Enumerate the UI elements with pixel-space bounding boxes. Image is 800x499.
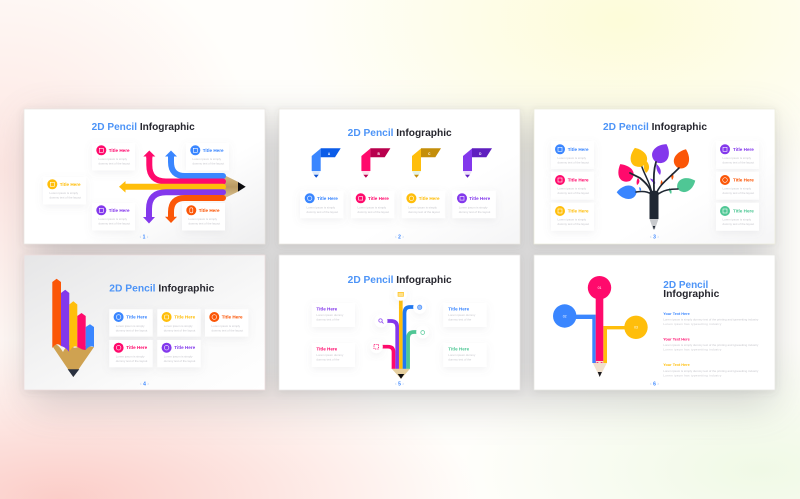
- card: pink: [312, 343, 355, 367]
- text block 1: Lorem ipsum is simply dummy text of the printing and typesetting industry: [663, 318, 759, 322]
- card: pink: [109, 340, 153, 367]
- text block 3: Lorem ipsum is simply dummy text of the printing and typesetting industry: [663, 369, 759, 373]
- text block 3: [663, 363, 759, 377]
- card: yellow: Title Here: [568, 209, 589, 214]
- card: blue: Lorem ipsum is simply: [116, 324, 145, 328]
- page number: ‹ 3 ›: [650, 234, 659, 240]
- card: green: dummy text of the layout: [722, 222, 754, 226]
- card: purple: [452, 191, 496, 218]
- card: yellow: dummy text of the layout: [50, 196, 81, 200]
- title: 2D Pencil Infographic: [603, 122, 707, 133]
- arrow: orange: [165, 198, 223, 223]
- card: pink: dummy text of the layout: [98, 162, 130, 166]
- text block 3: Lorem ipsum has typesetting industry: [663, 373, 722, 377]
- card: blue: [443, 303, 487, 327]
- card: purple: Lorem ipsum is simply: [98, 217, 128, 221]
- card: purple: Title Here: [174, 345, 196, 350]
- card: pink: [351, 191, 394, 218]
- text block 2: Lorem ipsum is simply dummy text of the printing and typesetting industry: [663, 343, 759, 347]
- card: purple: dummy text of the layout: [722, 160, 754, 164]
- arrow: yellow: [119, 181, 223, 193]
- card: orange: Lorem ipsum is simply: [722, 187, 752, 191]
- card: orange: Lorem ipsum is simply: [188, 217, 218, 221]
- card: orange: Title Here: [733, 178, 754, 183]
- card: pink: Lorem ipsum is simply: [558, 187, 587, 191]
- card: orange: Title Here: [222, 314, 243, 319]
- card: blue: dummy text of the layout: [192, 162, 224, 166]
- page number: ‹ 2 ›: [395, 234, 404, 240]
- card: green: Lorem ipsum is simply: [722, 218, 752, 222]
- page number: ‹ 6 ›: [650, 382, 659, 388]
- pencil A: A: [328, 152, 331, 156]
- card: pink: Title Here: [568, 178, 589, 183]
- panel shadow haze: [30, 120, 775, 405]
- pencil trunk: [650, 190, 658, 219]
- page number: ‹ 4 ›: [140, 382, 149, 388]
- card: purple: dummy text of the layout: [459, 210, 490, 214]
- card: pink: dummy text of the layout: [558, 191, 589, 195]
- text block 1: Lorem ipsum has typesetting industry: [663, 322, 722, 326]
- card: blue: Title Here: [317, 196, 338, 201]
- card: yellow: [402, 191, 445, 218]
- card: pink: Lorem ipsum is simply: [358, 206, 387, 210]
- leaves: [614, 140, 698, 199]
- text block 2: Lorem ipsum has typesetting industry: [663, 348, 722, 352]
- page number: ‹ 1 ›: [140, 234, 149, 240]
- card: orange: Lorem ipsum is simply: [212, 324, 241, 328]
- card: blue: Lorem ipsum is simply: [192, 157, 222, 161]
- title: 2D Pencil: [663, 280, 709, 291]
- card: purple: [157, 340, 201, 367]
- card: pink: [92, 143, 135, 170]
- card: blue: [109, 309, 153, 337]
- card: pink: [551, 172, 594, 200]
- panel: slide 3 pencil tree: [534, 109, 775, 244]
- card: green: [443, 343, 487, 367]
- pencil A: [312, 148, 341, 178]
- tree illustration: [614, 140, 698, 230]
- panel: slide 1 arrows: [24, 109, 265, 244]
- card: orange: dummy text of the layout: [212, 328, 243, 332]
- card: blue: Lorem ipsum is simply: [306, 206, 336, 210]
- title: [663, 280, 720, 300]
- pencil tip: [222, 174, 246, 200]
- panel: slide 2 bent pencils: [279, 109, 520, 244]
- pencil B: [361, 148, 390, 178]
- pencil D: D: [479, 152, 482, 156]
- card: orange: [182, 203, 225, 230]
- card: yellow: dummy text of the layout: [558, 222, 589, 226]
- text block 2: [663, 338, 759, 352]
- icon: green drop: [416, 326, 429, 338]
- card: green: Title Here: [448, 346, 470, 351]
- text block 1: [663, 312, 759, 326]
- branches: [630, 162, 679, 196]
- card: blue: dummy text of the layout: [558, 160, 589, 164]
- title: 2D Pencil Infographic: [348, 275, 452, 286]
- card: purple: dummy text of the layout: [164, 359, 195, 363]
- card: yellow: dummy text of the layout: [408, 210, 440, 214]
- arrow: blue: [165, 150, 223, 176]
- card: yellow: Lorem ipsum is simply: [408, 206, 437, 210]
- icon: blue target: [413, 301, 426, 314]
- card: yellow: Title Here: [60, 182, 81, 187]
- card: pink: dummy text of the layout: [116, 359, 147, 363]
- arrow: pink: [143, 150, 223, 182]
- card: purple: Lorem ipsum dummy: [316, 313, 344, 317]
- card: blue: Title Here: [126, 314, 148, 319]
- pencil D: [463, 148, 492, 178]
- text block 1: Your Text Here: [663, 312, 690, 316]
- card: green: dummy text of the: [448, 358, 472, 362]
- panel: slide 6 three-point pencil: [534, 255, 775, 390]
- title: 2D Pencil Infographic: [92, 122, 195, 133]
- card: purple: Title Here: [316, 306, 338, 311]
- card: yellow: [551, 203, 594, 231]
- card: blue: Title Here: [448, 306, 470, 311]
- card: yellow: Title Here: [419, 196, 440, 201]
- card: orange: dummy text of the layout: [188, 222, 220, 226]
- card: purple: Title Here: [469, 196, 491, 201]
- card: blue: dummy text of the: [448, 318, 472, 322]
- card: blue: Lorem ipsum dummy: [448, 313, 476, 317]
- card: purple: Lorem ipsum is simply: [722, 156, 752, 160]
- card: pink: dummy text of the layout: [358, 210, 389, 214]
- card: blue: Title Here: [568, 147, 589, 152]
- node 02: 02: [563, 314, 567, 318]
- card: pink: Lorem ipsum is simply: [116, 354, 145, 358]
- card: blue: [186, 143, 229, 170]
- panel: slide 5 branching pencil: [279, 255, 520, 390]
- pencil C: [412, 148, 441, 178]
- node 03: 03: [634, 326, 638, 330]
- card: pink: dummy text of the: [316, 358, 340, 362]
- text block 3: Your Text Here: [663, 363, 690, 367]
- card: pink: Lorem ipsum dummy: [316, 353, 344, 357]
- card: blue: Lorem ipsum is simply: [558, 156, 587, 160]
- card: blue: [300, 191, 344, 218]
- card: pink: Title Here: [126, 345, 148, 350]
- branching pencil: [382, 300, 417, 379]
- card: purple: Lorem ipsum is simply: [164, 354, 193, 358]
- icon: yellow image: [394, 288, 407, 301]
- pencil diagram: [553, 276, 648, 377]
- card: blue: dummy text of the layout: [116, 328, 147, 332]
- card: green: Lorem ipsum dummy: [448, 353, 476, 357]
- card: blue: dummy text of the layout: [306, 210, 338, 214]
- title: 2D Pencil Infographic: [109, 284, 215, 294]
- card: blue: Title Here: [203, 148, 224, 153]
- card: purple: dummy text of the: [316, 318, 340, 322]
- card: orange: dummy text of the layout: [722, 191, 754, 195]
- card: yellow: Lorem ipsum is simply: [164, 324, 193, 328]
- card: pink: Title Here: [109, 148, 130, 153]
- card: pink: Title Here: [316, 346, 338, 351]
- node 01: 01: [598, 286, 601, 290]
- text block 2: Your Text Here: [663, 338, 690, 342]
- card: yellow: [43, 177, 86, 204]
- title: 2D Pencil Infographic: [348, 128, 452, 139]
- card: purple: Title Here: [109, 208, 130, 213]
- card: green: [716, 203, 759, 231]
- card: pink: Lorem ipsum is simply: [98, 157, 128, 161]
- card: pink: Title Here: [368, 196, 389, 201]
- card: yellow: Lorem ipsum is simply: [50, 191, 79, 195]
- card: yellow: [157, 309, 201, 337]
- icon: pink frame: [370, 340, 383, 353]
- card: purple: dummy text of the layout: [98, 222, 130, 226]
- page number: ‹ 5 ›: [395, 382, 404, 388]
- card: orange: Title Here: [199, 208, 220, 213]
- pencil C: C: [428, 152, 431, 156]
- card: purple: [312, 303, 355, 327]
- icon: purple magnifier: [374, 314, 388, 328]
- card: orange: [205, 309, 248, 337]
- card: purple: Lorem ipsum is simply: [459, 206, 488, 210]
- panel: slide 4 multi-colour pencil: [24, 255, 265, 390]
- arrow: purple: [143, 192, 223, 224]
- card: purple: Title Here: [733, 147, 754, 152]
- pencil B: B: [378, 152, 381, 156]
- card: green: Title Here: [733, 209, 754, 214]
- card: purple: [716, 141, 759, 169]
- card: yellow: dummy text of the layout: [164, 328, 195, 332]
- card: yellow: Title Here: [174, 314, 196, 319]
- card: yellow: Lorem ipsum is simply: [558, 218, 587, 222]
- card: purple: [92, 203, 135, 230]
- pencil illustration: [52, 279, 94, 377]
- title: Infographic: [663, 289, 720, 300]
- card: blue: [551, 141, 594, 169]
- card: orange: [716, 172, 759, 200]
